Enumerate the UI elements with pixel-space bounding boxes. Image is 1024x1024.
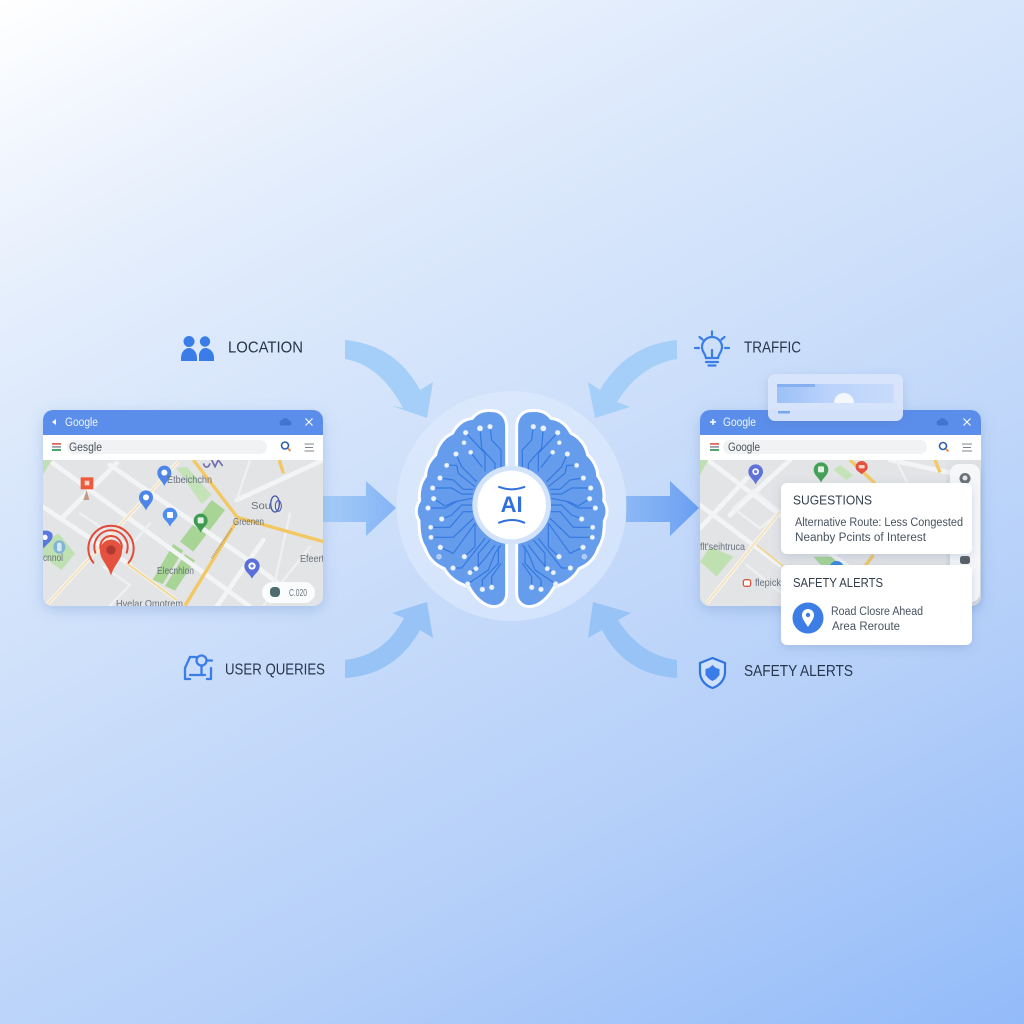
icon: location pin badge [792,602,824,634]
AI core: AI [501,492,523,517]
label: traffic: TRAFFIC [744,340,801,356]
label: traffic [695,332,801,366]
pins [42,460,281,579]
panel: side toolbar [950,464,980,602]
left hemisphere [416,411,507,607]
browser header: Google [65,417,98,429]
panel: suggestions card: Neanby Pcints of Interest [795,532,927,544]
label: user queries [185,656,325,679]
arrow: traffic to brain [588,340,677,418]
arrow: brain to output map [626,481,699,536]
search bar [43,435,323,460]
arrow: location to brain [345,340,433,418]
right hemisphere [517,411,607,607]
map labels: cnnol [43,552,63,564]
map labels: flt'seihtruca [700,541,745,553]
map labels: Greenen [233,516,264,528]
brain with circuits [416,411,607,607]
label: location: LOCATION [228,340,303,356]
icon: red location pin with signal rings [88,526,134,576]
map labels: Sou [251,500,271,512]
map: city streets [700,460,981,606]
map labels [43,474,324,610]
search bar: Gesgle [69,442,102,454]
search bar: Google [728,442,760,454]
search bar [700,435,981,460]
arrow: map input to brain [323,481,396,536]
map labels: Efeert [300,553,324,565]
icon: light bulb [695,332,729,366]
map: city streets [42,460,324,610]
panel: suggestions card: Alternative Route: Less Congested [795,517,963,529]
pins [743,461,868,586]
infographic canvas [38,330,986,690]
label: location [181,336,303,361]
icon: two people [181,336,214,361]
map labels [700,541,782,589]
label: safety alerts: SAFETY ALERTS [744,663,853,680]
AI core [472,466,551,544]
icon: user queries [185,656,212,679]
panel: left map window [42,410,324,610]
icon: shield [700,658,725,688]
map labels: Etbeichchn [167,474,212,486]
browser header: Google [723,417,756,429]
panel: safety alerts card: Area Reroute [832,621,900,633]
label: user queries: USER QUERIES [225,662,325,678]
map labels: flepick [755,577,782,589]
zoom chip [262,582,315,603]
browser header [43,410,323,435]
panel: safety alerts card: Road Closre Ahead [831,606,923,618]
panel: right map window [700,410,981,606]
label: safety alerts [700,658,853,688]
arrow: user queries to brain [345,602,433,678]
map labels: Hvelar Omotrem [116,598,183,610]
halo behind brain [396,391,626,621]
panel: suggestions card [781,483,972,554]
panel: safety alerts card: SAFETY ALERTS [793,575,883,590]
panel: suggestions card: SUGESTIONS [793,492,872,508]
map labels: Elecnhlon [157,565,194,577]
arrow: safety alerts to brain [588,602,677,678]
panel: safety alerts card [781,565,972,645]
browser header [700,410,981,435]
panel: floating traffic card [768,374,903,421]
zoom chip: C.020 [289,587,307,599]
